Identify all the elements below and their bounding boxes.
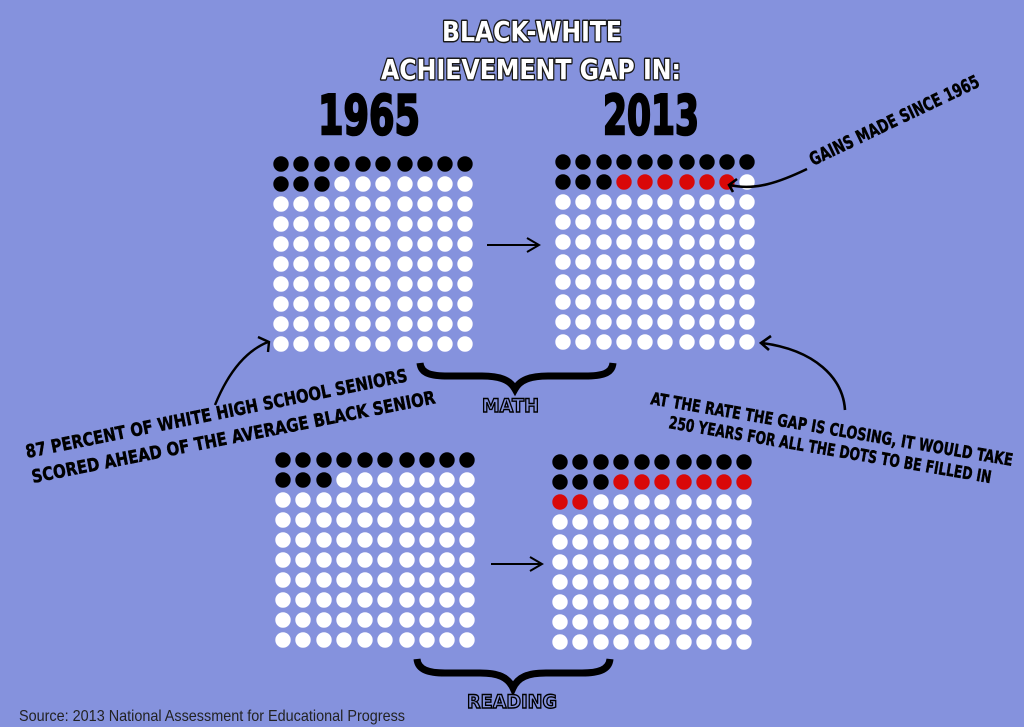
brace: reading	[417, 659, 610, 688]
dot grid: reading 2013	[552, 454, 752, 650]
title: ACHIEVEMENT GAP IN:	[381, 53, 681, 86]
title: BLACK-WHITE	[442, 15, 622, 48]
brace: math	[420, 363, 613, 389]
label: math: MATH	[482, 395, 539, 417]
heading: 1965: 1965	[318, 84, 420, 147]
arrow: from 250 years callout	[761, 336, 845, 410]
title	[381, 15, 681, 86]
dot grid: math 2013	[555, 154, 755, 350]
callout: 87 percent: 87 PERCENT OF WHITE HIGH SCHOOL SENIORS	[24, 365, 409, 463]
arrow: from 87 percent callout	[215, 337, 269, 405]
arrow: math 1965 to 2013	[487, 238, 539, 252]
dot grid: math 1965	[273, 156, 473, 352]
source note: Source: 2013 National Assessment for Educational Progress	[19, 708, 405, 725]
callout: 87 percent: SCORED AHEAD OF THE AVERAGE BLACK SENIOR	[30, 387, 437, 488]
dot grid: reading 1965	[275, 452, 475, 648]
arrow: from gains callout	[729, 169, 807, 192]
label: reading: READING	[467, 691, 557, 713]
heading: 2013: 2013	[603, 84, 699, 147]
arrow: reading 1965 to 2013	[491, 557, 542, 571]
